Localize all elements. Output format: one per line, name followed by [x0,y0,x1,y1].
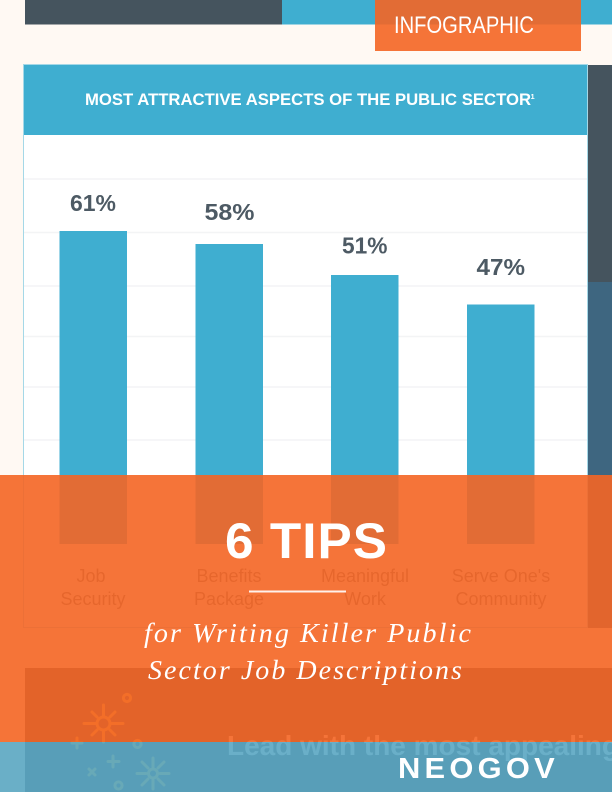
bar chart [60,231,534,544]
logo: NEOGOV: NEOGOV [398,753,559,785]
infographic tag: INFOGRAPHIC [394,12,534,39]
chart heading: MOST ATTRACTIVE ASPECTS OF THE PUBLIC SECTOR [85,91,531,109]
subtitle [144,618,473,685]
category labels: Benefits [196,566,262,586]
category labels: Community [455,589,547,609]
subtitle: Sector Job Descriptions [148,655,464,685]
category labels: Security [60,589,126,609]
title divider [249,590,346,592]
panel: lower section [25,668,612,792]
category labels [60,566,550,609]
category labels: Package [194,589,264,609]
right dark column [588,65,612,282]
lead text: Lead with the most appealing [227,730,612,761]
top dark bar [25,0,282,24]
category labels: Job [76,566,106,586]
right slate column [588,282,612,628]
title: 6 tips: 6 TIPS [225,513,388,569]
category labels: Meaningful [321,566,409,586]
icons: sparkle cluster [72,694,169,789]
infographic tag [375,0,581,51]
value labels: 47% [476,254,525,280]
orange cover overlay [0,475,612,742]
value labels: 61% [70,190,116,216]
subtitle: for Writing Killer Public [144,618,473,648]
chart heading: 1 [530,92,535,101]
category labels: Serve One's [452,566,550,586]
value labels [70,190,525,280]
bottom blue band [0,742,612,792]
value labels: 58% [204,199,254,225]
value labels: 51% [342,232,388,258]
category labels: Work [344,589,387,609]
top blue bar [282,0,612,24]
panel: bar chart card [24,64,588,628]
